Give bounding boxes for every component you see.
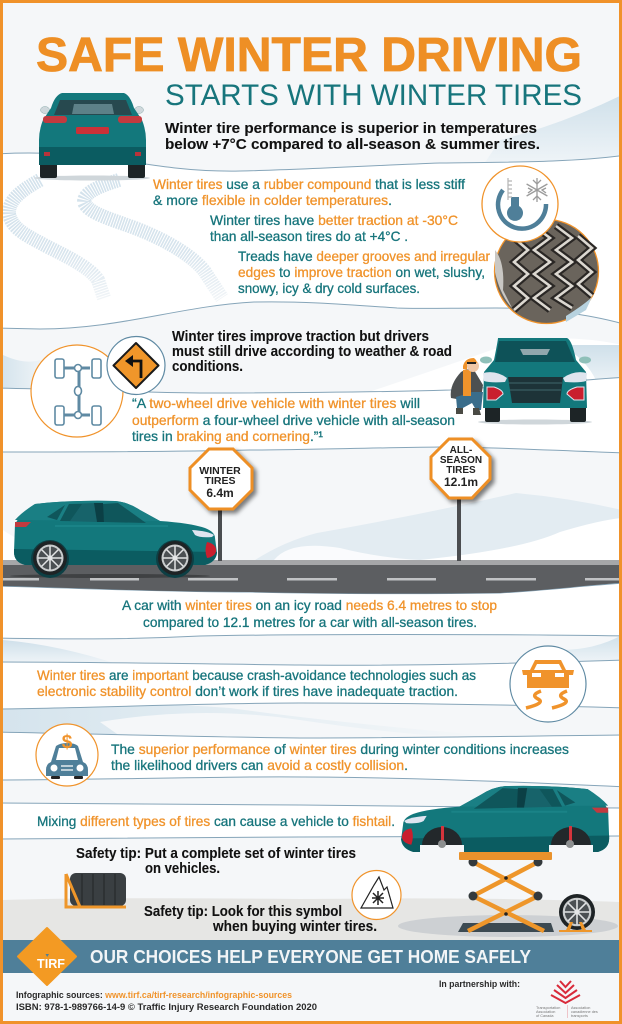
two-wheel drive quote: “A two-wheel drive vehicle with winter tires will (132, 395, 420, 411)
rubber compound text: & more flexible in colder temperatures. (153, 192, 392, 208)
two-wheel drive quote: outperform a four-wheel drive vehicle with all-season (132, 412, 455, 428)
intro statement (165, 121, 540, 153)
partner logo: Transportation (536, 1006, 560, 1010)
partnership label: In partnership with: (439, 979, 520, 989)
tire tread photo (494, 220, 598, 324)
subtitle: STARTS WITH WINTER TIRES (165, 79, 582, 112)
sources: ISBN: 978-1-989766-14-9 © Traffic Injury Research Foundation 2020 (16, 1002, 317, 1012)
white snow band: technology (0, 660, 622, 709)
slogan banner (3, 940, 619, 973)
road safety statement (172, 329, 452, 375)
road safety statement: Winter tires improve traction but drivers (172, 329, 429, 345)
partner logo: transports (571, 1014, 588, 1018)
stopping distance text (122, 597, 497, 630)
safety tip two (144, 904, 377, 935)
safety tip two: Safety tip: Look for this symbol (144, 904, 342, 920)
intro statement: below +7°C compared to all-season & summer tires. (165, 137, 540, 153)
crash-avoidance text: Winter tires are important because crash-avoidance technologies such as (37, 667, 476, 683)
white snow band: stopping distance (0, 583, 622, 639)
partner logo (536, 981, 598, 1018)
person checking tire (451, 358, 483, 415)
sign: winter tires 6.4m: WINTER (199, 465, 241, 477)
icon: winding road sign (107, 336, 165, 394)
treads text (238, 248, 490, 296)
sign: winter tires 6.4m (190, 449, 252, 561)
rear view car (34, 93, 150, 180)
stack of tires on rack (66, 873, 126, 907)
collision text: the likelihood drivers can avoid a costly collision. (111, 757, 408, 773)
slogan banner: OUR CHOICES HELP EVERYONE GET HOME SAFELY (90, 947, 531, 967)
white snow band: mixing tires (0, 803, 622, 839)
collision text: The superior performance of winter tires during winter conditions increases (111, 741, 569, 757)
two-wheel drive quote (132, 395, 455, 444)
intro statement: Winter tire performance is superior in temperatures (165, 121, 537, 137)
partner logo: canadienne des (571, 1010, 598, 1014)
crash-avoidance text (37, 667, 476, 699)
partner logo: Association (571, 1006, 590, 1010)
safety tip two: when buying winter tires. (212, 919, 377, 935)
treads text: edges to improve traction on wet, slushy, (238, 264, 485, 280)
stopping distance text: compared to 12.1 metres for a car with all-season tires. (143, 614, 477, 630)
title: SAFE WINTER DRIVING (36, 29, 582, 82)
icon: skidding car (510, 646, 586, 722)
logo: TIRF diamond: TIRF (37, 956, 65, 971)
treads text: snowy, icy & dry cold surfaces. (238, 280, 420, 296)
sign: all-season tires 12.1m: ALL- (450, 445, 472, 456)
logo: TIRF diamond (18, 928, 76, 985)
white snow band: section 2 (0, 377, 622, 453)
road safety statement: conditions. (172, 359, 243, 375)
safety tip one: on vehicles. (145, 861, 220, 877)
crash-avoidance text: electronic stability control don’t work if tires have inadequate traction. (37, 683, 458, 699)
front view car (478, 338, 592, 424)
traction text: than all-season tires do at +4°C . (210, 228, 408, 244)
collision text (111, 741, 569, 773)
icon: drivetrain (31, 345, 123, 437)
safety tip one: Safety tip: Put a complete set of winter tires (76, 846, 356, 862)
sources: Infographic sources: www.tirf.ca/tirf-research/infographic-sources (16, 990, 292, 1000)
icon: thermometer and snowflake (482, 166, 558, 242)
sign: all-season tires 12.1m (431, 439, 490, 561)
ground strip (3, 898, 619, 940)
road (3, 560, 619, 594)
icon: car with dollar sign: $ (62, 732, 73, 753)
white snow band: section 1 (0, 153, 622, 329)
road safety statement: must still drive according to weather & road (172, 344, 452, 360)
icon: mountain snowflake symbol (352, 870, 401, 920)
background snow drifts (3, 95, 622, 736)
white snow band: collision (0, 732, 622, 787)
sign: winter tires 6.4m: 6.4m (206, 486, 234, 500)
car on scissor lift (401, 786, 609, 932)
treads text: Treads have deeper grooves and irregular (238, 248, 490, 264)
rubber compound text (153, 176, 465, 208)
mixing tires text: Mixing different types of tires can cause a vehicle to fishtail. (37, 813, 395, 829)
partner logo: of Canada (536, 1014, 554, 1018)
side view car on road (10, 501, 217, 578)
sign: all-season tires 12.1m: TIRES (446, 465, 476, 476)
stopping distance text: A car with winter tires on an icy road needs 6.4 metres to stop (122, 597, 497, 613)
safety tip one (76, 846, 356, 877)
sources (16, 990, 317, 1012)
partner logo: Association (536, 1010, 555, 1014)
sign: all-season tires 12.1m: 12.1m (444, 475, 478, 489)
tire tracks in snow (9, 180, 222, 298)
sign: winter tires 6.4m: TIRES (205, 475, 235, 487)
rubber compound text: Winter tires use a rubber compound that is less stiff (153, 176, 465, 192)
lift shadow (398, 915, 618, 937)
traction text (210, 212, 458, 244)
sign: all-season tires 12.1m: SEASON (440, 455, 482, 466)
two-wheel drive quote: tires in braking and cornering.”¹ (132, 428, 323, 444)
icon: car with dollar sign (36, 724, 98, 786)
traction text: Winter tires have better traction at -30°C (210, 212, 458, 228)
